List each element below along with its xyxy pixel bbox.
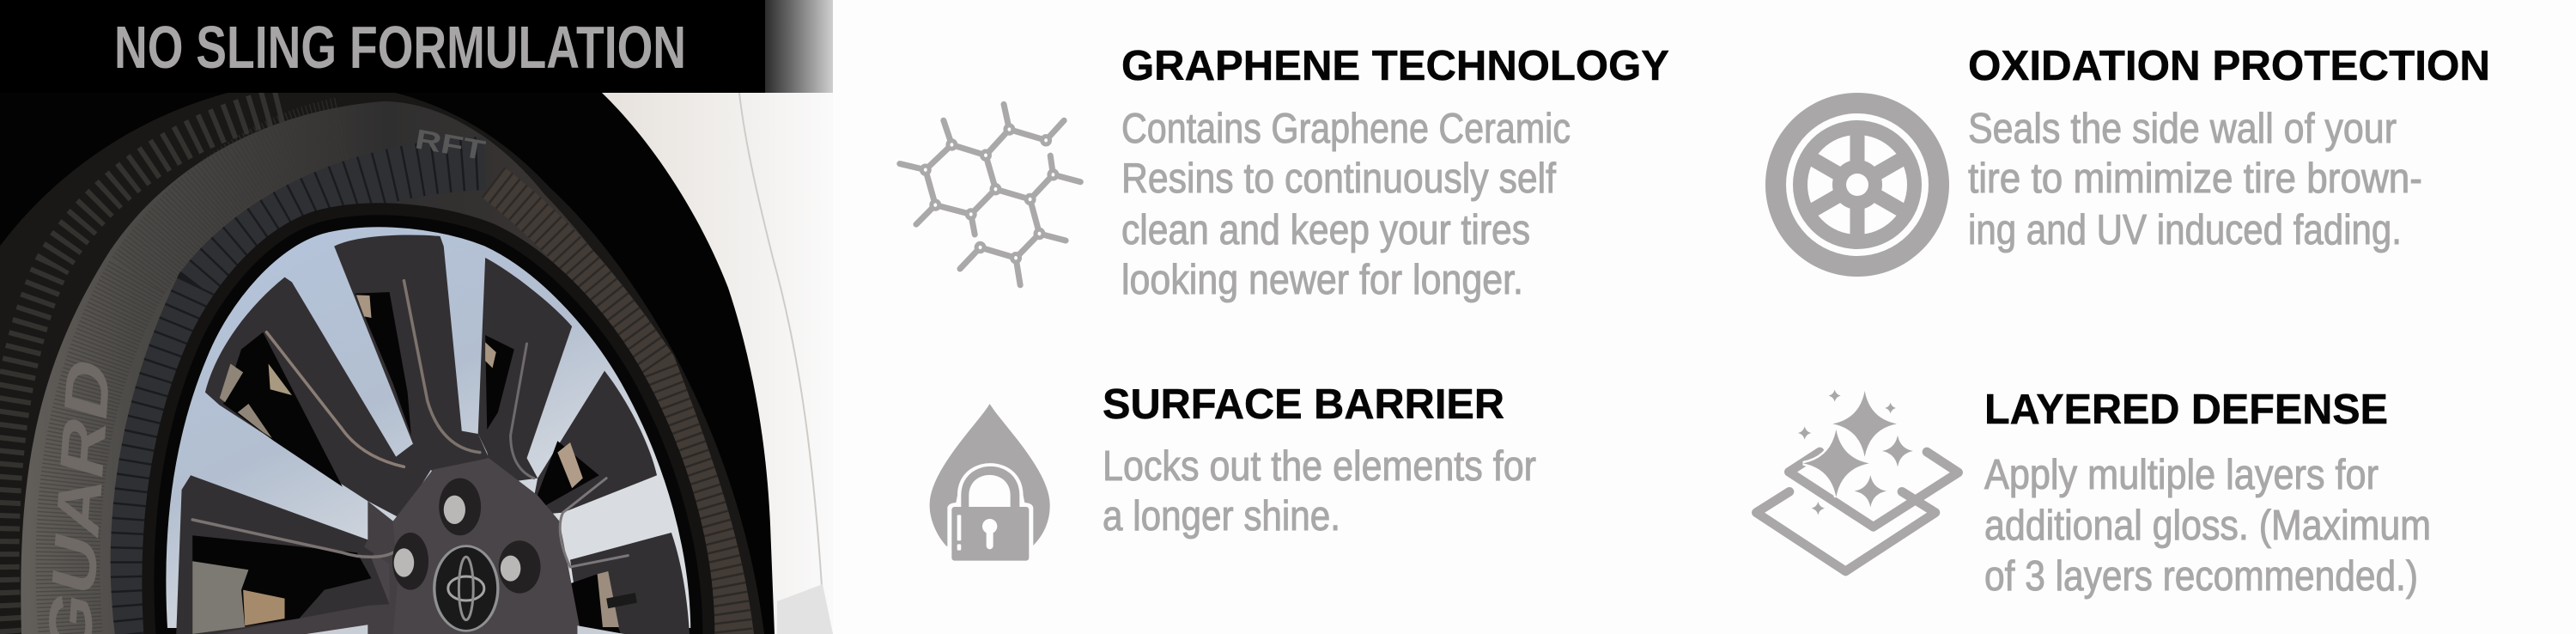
header bar [0, 0, 833, 93]
description: a longer shine. [1103, 493, 1340, 540]
icon: layers with sparkles [1756, 390, 1959, 571]
photo: tire and alloy wheel [0, 82, 833, 634]
brake parts [192, 295, 619, 634]
feature: oxidation protection [1765, 43, 2490, 277]
description: Resins to continuously self [1121, 155, 1556, 202]
heading: GRAPHENE TECHNOLOGY [1121, 43, 1669, 89]
description: looking newer for longer. [1121, 257, 1523, 303]
description [1968, 106, 2422, 253]
alloy wheel [160, 221, 696, 634]
description [1984, 452, 2431, 600]
icon: graphene molecule [900, 104, 1080, 285]
spoke highlights [192, 281, 628, 567]
wheel openings [192, 292, 621, 634]
icon: wheel [1765, 93, 1949, 277]
description: Apply multiple layers for [1984, 452, 2379, 498]
lug nuts [392, 479, 541, 594]
description: additional gloss. (Maximum [1984, 503, 2431, 549]
description [1121, 106, 1571, 303]
lower left spoke [216, 501, 398, 634]
feature: graphene technology [900, 43, 1669, 303]
description: ing and UV induced fading. [1968, 207, 2402, 253]
title: NO SLING FORMULATION [114, 14, 686, 81]
feature: surface barrier [930, 381, 1536, 564]
description [1103, 443, 1536, 540]
description: of 3 layers recommended.) [1984, 553, 2418, 600]
feature: layered defense [1756, 387, 2431, 600]
tire logo: RFT [413, 123, 488, 166]
description: Locks out the elements for [1103, 443, 1536, 490]
lower polished spokes [307, 625, 624, 634]
wheel hub [372, 458, 581, 634]
description: clean and keep your tires [1121, 207, 1530, 253]
description: Contains Graphene Ceramic [1121, 106, 1571, 152]
valve stem [606, 593, 637, 608]
dark wheel recesses [176, 235, 690, 634]
icon: water drop with padlock [930, 404, 1050, 564]
description: tire to mimimize tire brown- [1968, 155, 2422, 202]
car body panel [602, 93, 833, 634]
heading: LAYERED DEFENSE [1984, 387, 2388, 433]
heading: SURFACE BARRIER [1103, 381, 1504, 428]
Toyota emblem [434, 546, 498, 631]
description: Seals the side wall of your [1968, 106, 2397, 152]
heading: OXIDATION PROTECTION [1968, 43, 2490, 89]
tire [0, 82, 764, 634]
